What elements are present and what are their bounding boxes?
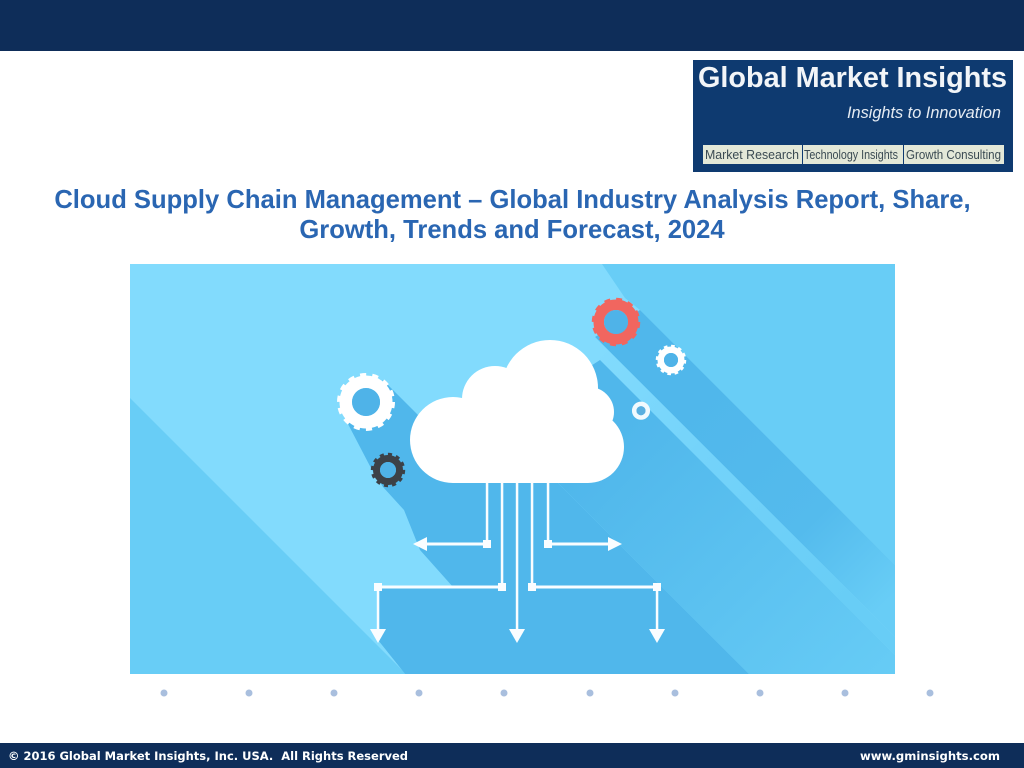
light stripe	[577, 337, 895, 655]
illustration panel: cloud network	[130, 264, 895, 680]
icon: cloud	[410, 340, 624, 483]
icon: red gear	[593, 299, 639, 345]
footer bar	[0, 743, 1024, 768]
title: Cloud Supply Chain Management – Global Industry Analysis Report, Share,	[54, 186, 971, 214]
logo: Global Market Insights: Global Market Insights	[698, 62, 1007, 94]
logo: Global Market Insights: Growth Consulting	[906, 147, 1001, 162]
footer bar: © 2016 Global Market Insights, Inc. USA. All Rights Reserved	[8, 749, 408, 763]
logo: Global Market Insights: Insights to Innovation	[847, 103, 1001, 122]
title: Growth, Trends and Forecast, 2024	[299, 216, 725, 244]
cloud long shadow, fading part	[558, 360, 895, 674]
icon: tiny white gear	[634, 404, 648, 418]
icon: large white gear	[338, 374, 394, 430]
logo: Global Market Insights: Technology Insights	[804, 147, 898, 162]
footer bar: www.gminsights.com	[860, 749, 1000, 763]
logo: Global Market Insights: Market Research	[705, 147, 799, 162]
top header bar	[0, 0, 1024, 51]
red gear long shadow	[595, 310, 895, 637]
network arrows	[370, 483, 665, 643]
cloud and arrows long shadow, solid part	[348, 380, 755, 680]
title	[54, 186, 971, 244]
pagination dots	[160, 690, 934, 696]
icon: dark gear	[372, 454, 404, 486]
icon: small white gear	[657, 346, 685, 374]
logo: Global Market Insights	[693, 60, 1013, 172]
